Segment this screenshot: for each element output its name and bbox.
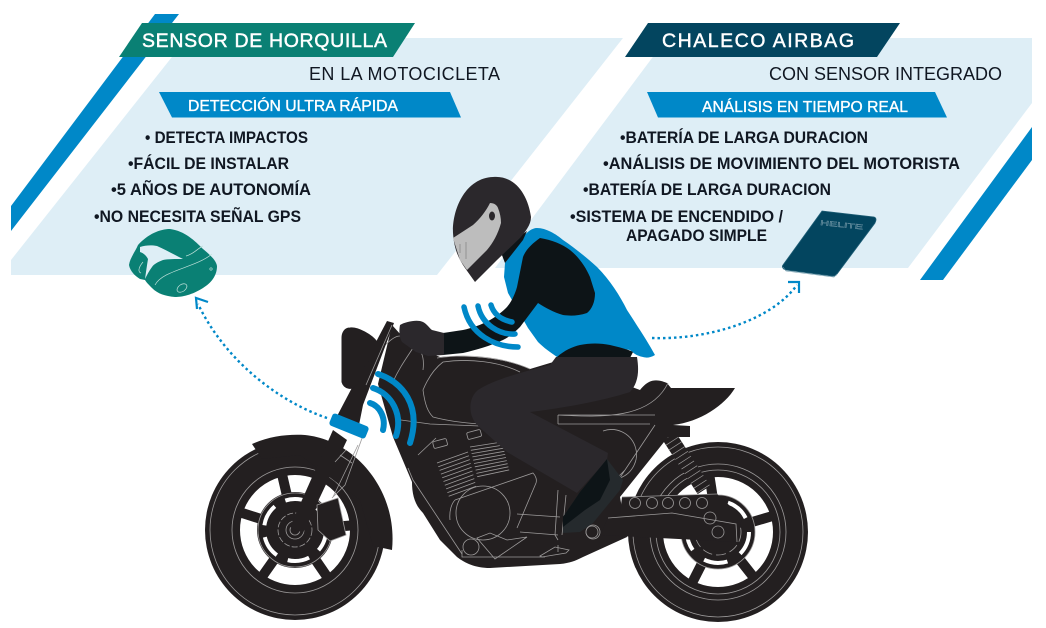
neck (500, 231, 527, 263)
ribbon: detección ultra rápida (159, 92, 461, 118)
icon: airbag control unit (782, 211, 876, 277)
icon: fork sensor (129, 229, 217, 297)
feature list right: •ANÁLISIS DE MOVIMIENTO DEL MOTORISTA (603, 154, 960, 173)
visor (453, 203, 501, 270)
brake caliper (317, 498, 346, 541)
feature list right: •SISTEMA DE ENCENDIDO / (570, 208, 783, 226)
front wheel (205, 440, 385, 620)
front fork (290, 321, 394, 533)
feature list left: •NO NECESITA SEÑAL GPS (94, 206, 301, 226)
feature list left (94, 129, 311, 226)
engine line details (352, 325, 668, 559)
feature list right: •BATERÍA DE LARGA DURACION (583, 180, 831, 199)
helmet (453, 177, 531, 282)
headlight (342, 328, 377, 388)
subtitle left: EN LA MOTOCICLETA (309, 64, 500, 84)
arrow: to airbag unit (652, 282, 799, 338)
swingarm (586, 494, 742, 542)
arrow: to fork sensor (196, 298, 327, 418)
logo on unit: HELITE (820, 220, 864, 232)
glove (399, 321, 444, 356)
banner: chaleco airbag: CHALECO AIRBAG (662, 30, 854, 52)
vest: airbag (504, 228, 655, 358)
ribbon: detección ultra rápida: DETECCIÓN ULTRA RÁPIDA (188, 96, 398, 115)
engine and frame (378, 325, 735, 568)
icon: signal waves on fork (370, 374, 414, 443)
feature list left: •5 AÑOS DE AUTONOMÍA (111, 179, 311, 199)
ribbon: análisis en tiempo real (647, 92, 947, 118)
rear shock (669, 436, 704, 490)
ribbon: análisis en tiempo real: ANÁLISIS EN TIEMPO REAL (702, 97, 908, 116)
icon: blue fork sensor (328, 413, 370, 439)
accent stripe left (11, 14, 179, 231)
trousers (470, 357, 638, 493)
rear wheel (628, 442, 808, 622)
feature list right (570, 128, 960, 245)
boot (563, 459, 623, 533)
accent stripe right (920, 127, 1032, 280)
lower jacket (557, 344, 633, 358)
feature list right: APAGADO SIMPLE (626, 227, 767, 245)
panel: chaleco airbag (495, 23, 1032, 280)
feature list left: • DETECTA IMPACTOS (145, 129, 308, 147)
feature list left: •FÁCIL DE INSTALAR (128, 154, 289, 173)
front fender (252, 435, 393, 550)
panel: sensor de horquilla (11, 14, 623, 275)
banner: sensor de horquilla (119, 23, 415, 57)
jacket and arm (443, 238, 595, 355)
rider (399, 177, 655, 533)
banner: sensor de horquilla: SENSOR DE HORQUILLA (142, 30, 387, 52)
feature list right: •BATERÍA DE LARGA DURACION (620, 128, 868, 147)
subtitle right: CON SENSOR INTEGRADO (769, 64, 1002, 84)
banner: chaleco airbag (625, 23, 900, 57)
icon: signal waves on vest (464, 305, 518, 347)
motorcycle (205, 321, 808, 622)
